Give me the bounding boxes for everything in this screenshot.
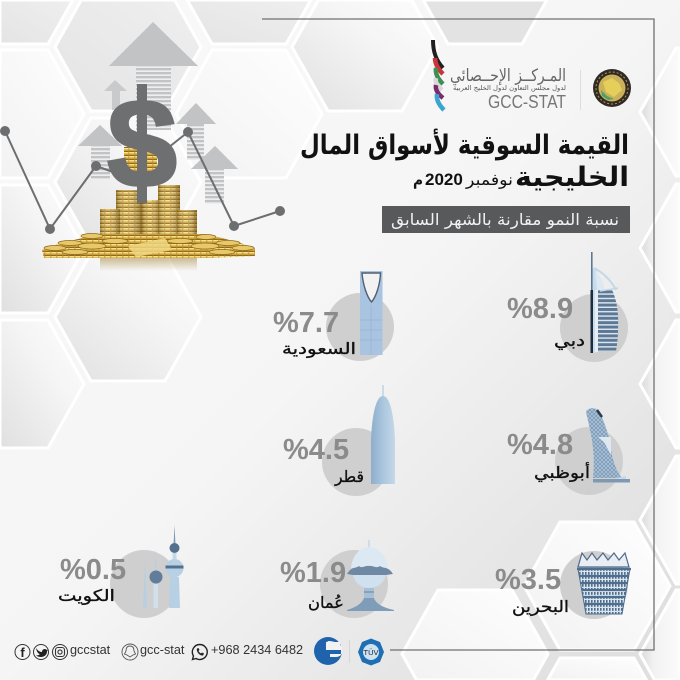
name: أبوظبي [534, 462, 590, 483]
name: الكويت [58, 586, 115, 606]
icon: facebook: f [20, 645, 25, 660]
growth arrows [78, 22, 238, 204]
name: البحرين [512, 597, 569, 617]
item: Kuwait [58, 525, 184, 618]
item: Bahrain [495, 551, 631, 619]
line chart [0, 126, 285, 234]
value: %1.9 [280, 557, 346, 589]
icon: TUV certification logo: TÜV [364, 648, 378, 657]
value: %4.8 [507, 429, 573, 461]
title: نوفمبر [465, 170, 513, 190]
icon: Doha Tower [371, 385, 395, 484]
icon: instagram [52, 644, 68, 660]
item: Dubai [507, 252, 628, 362]
item: Saudi Arabia [273, 271, 394, 361]
title: القيمة السوقية لأسواق المال [300, 128, 629, 161]
logo: GCC-STAT [433, 40, 566, 112]
ribbon [433, 40, 444, 110]
icon: twitter [34, 644, 48, 660]
title: م [413, 171, 423, 189]
name: دبي [554, 331, 585, 351]
value: %3.5 [495, 564, 561, 596]
item: Qatar [283, 385, 395, 496]
logo subtitle: لدول مجلس التعاون لدول الخليج العربية [453, 84, 566, 92]
name: عُمان [308, 593, 344, 612]
logo latin name: GCC-STAT [488, 92, 566, 112]
title: 2020 [425, 170, 463, 189]
value: %0.5 [60, 554, 126, 586]
title [300, 128, 629, 193]
item: Oman [280, 540, 394, 618]
icon: Bahrain tower [577, 553, 631, 614]
divider in logo [580, 70, 581, 110]
value: %7.7 [273, 307, 339, 339]
icon: Kuwait Towers [143, 525, 184, 608]
illustration: money growth [0, 22, 285, 271]
icon: Oman monument [347, 540, 394, 611]
coin stacks [42, 147, 255, 271]
item: Abu Dhabi [507, 408, 630, 495]
subtitle bar: نسبة النمو مقارنة بالشهر السابق [391, 210, 619, 230]
content frame lines [262, 19, 654, 650]
value: %4.5 [283, 434, 349, 466]
icon: TUV certification logo [358, 638, 384, 666]
value: %8.9 [507, 293, 573, 325]
icon: Kingdom Tower [360, 271, 382, 355]
icon: G certification logo [314, 637, 342, 665]
name: قطر [334, 467, 364, 487]
footer: social contacts [15, 643, 303, 660]
subtitle bar [382, 206, 630, 233]
dollar sign: $ [107, 73, 177, 214]
icon: GCC emblem [593, 69, 631, 107]
icon: Burj Al Arab [590, 252, 618, 353]
name: السعودية [282, 339, 356, 359]
title: الخليجية [515, 162, 629, 193]
icon: Capital Gate [586, 408, 630, 482]
icon: snapchat [122, 644, 138, 660]
icon: facebook [15, 644, 30, 660]
handle: gccstat: gccstat [70, 643, 111, 657]
handle: gcc-stat: gcc-stat [140, 643, 185, 657]
divider in footer [349, 640, 350, 663]
icon: whatsapp [192, 644, 207, 660]
phone number: +968 2434 6482 [211, 643, 303, 657]
logo Arabic name: المـركــز الإحــصائي [450, 66, 566, 86]
